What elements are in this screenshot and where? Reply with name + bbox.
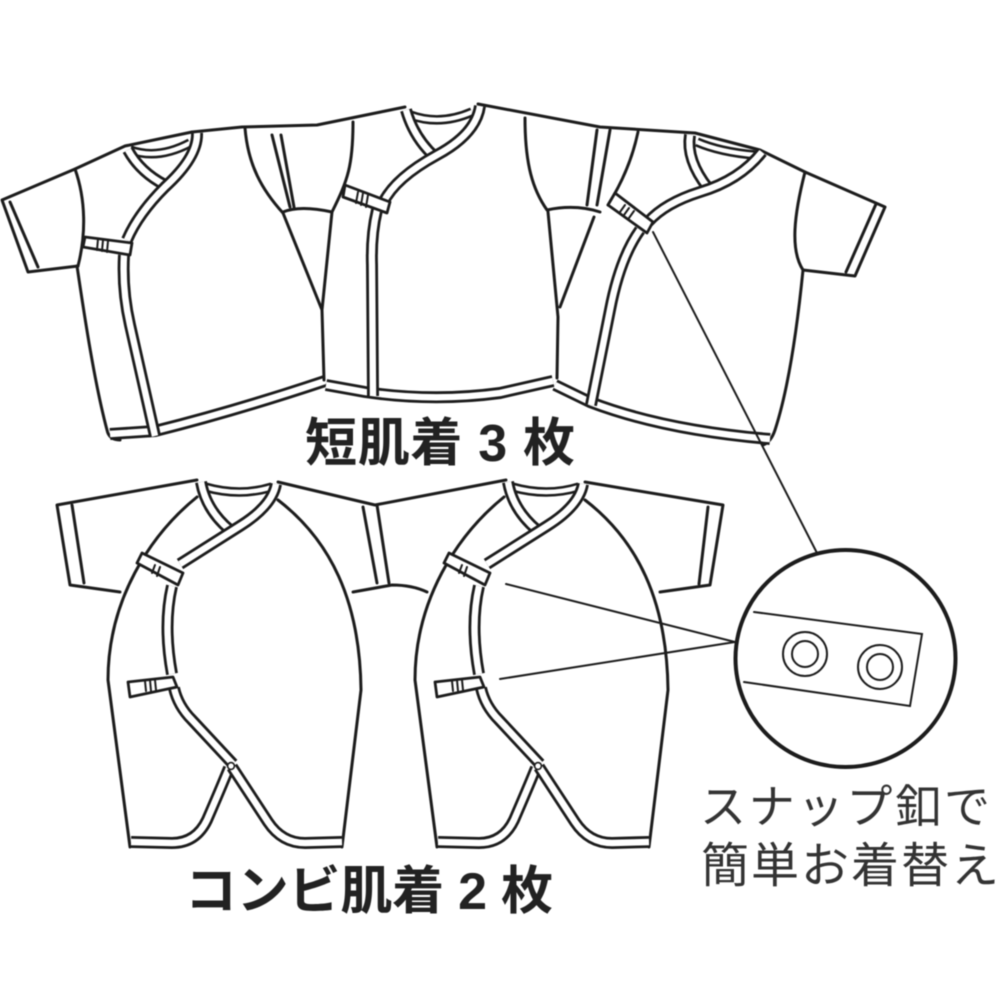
callout: snap button detail circle bbox=[736, 550, 956, 767]
heading: bodysuits: コンビ肌着 2 枚 bbox=[185, 863, 553, 921]
garment: short undershirt middle bbox=[192, 106, 553, 397]
garment: short undershirt right bbox=[478, 104, 885, 445]
arrow: leader line from shirt snap to detail circle bbox=[653, 232, 817, 553]
caption: snap buttons for easy changing: スナップ釦で bbox=[700, 781, 990, 833]
arrow: leader line from upper bodysuit snap bbox=[506, 584, 735, 642]
sleeves: shared middle sleeves bbox=[278, 480, 506, 592]
icon: left snap bbox=[783, 632, 827, 676]
caption: snap buttons for easy changing: 簡単お着替え bbox=[701, 840, 999, 893]
garment: bodysuit right bbox=[415, 482, 668, 847]
icon: right snap bbox=[858, 645, 902, 689]
sleeves: bodysuit left outer sleeve bbox=[57, 480, 197, 592]
caption: snap buttons for easy changing bbox=[700, 781, 999, 893]
garment: short undershirt left bbox=[2, 132, 325, 440]
sleeves: bodysuit right outer sleeve bbox=[585, 482, 723, 592]
arrow: leader line from lower bodysuit snap bbox=[500, 642, 735, 679]
garment: bodysuit left bbox=[108, 482, 361, 847]
heading: short undershirts: 短肌着 3 枚 bbox=[305, 415, 575, 473]
